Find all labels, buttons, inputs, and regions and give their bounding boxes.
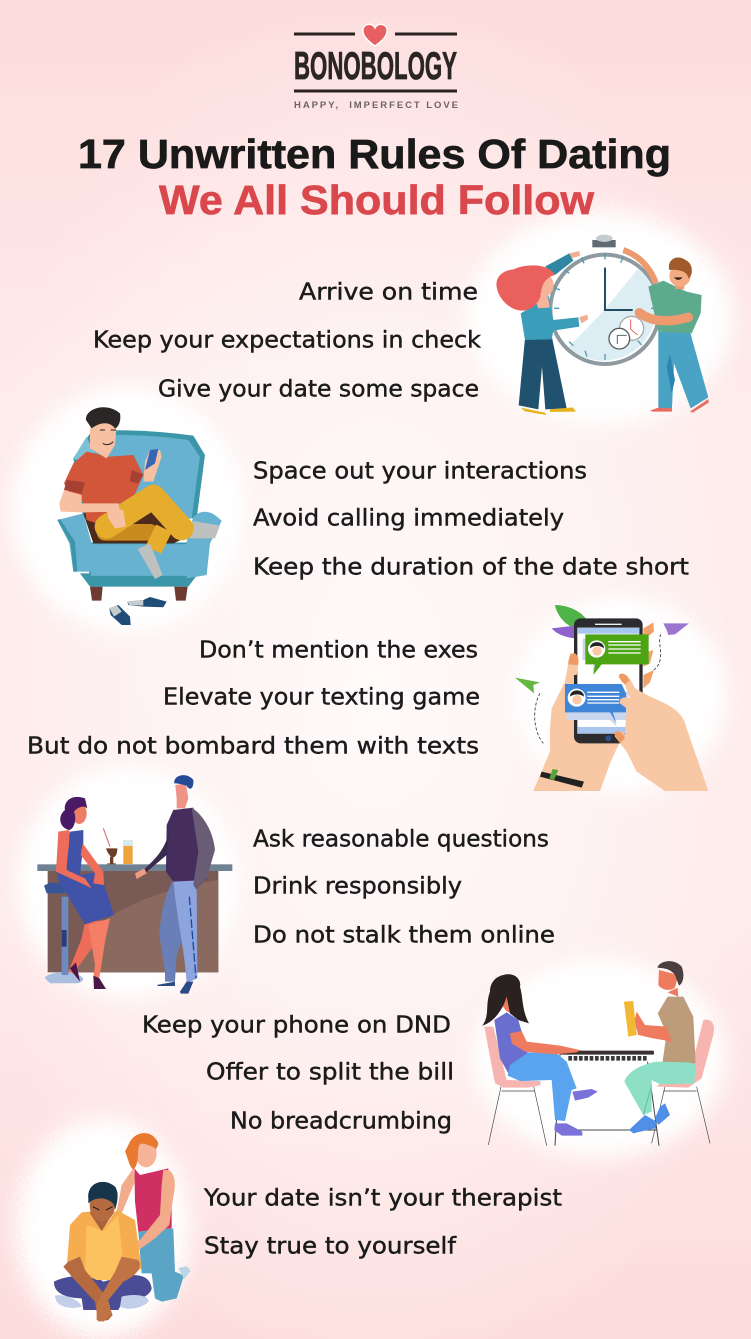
rules group 1: Arrive on time: [299, 279, 478, 305]
icon: heart: [363, 24, 387, 46]
rules group 5: [142, 1012, 454, 1134]
rules group 3: But do not bombard them with texts: [27, 733, 479, 759]
logo: BONOBOLOGY: [294, 45, 457, 88]
rules group 4: [253, 826, 555, 948]
illustration: couple at a bar counter: [37, 775, 232, 994]
rules group 1: Keep your expectations in check: [93, 327, 482, 353]
logo: HAPPY, IMPERFECT LOVE: [294, 100, 458, 111]
rules group 3: Don’t mention the exes: [199, 637, 478, 663]
illustration: hands holding phone with chat bubbles: [515, 605, 708, 791]
rules group 6: Your date isn’t your therapist: [203, 1185, 562, 1211]
logo: [294, 24, 458, 111]
rules group 6: Stay true to yourself: [204, 1233, 457, 1259]
illustration: couple holding a clock: [496, 235, 709, 415]
illustration: man on armchair with phone: [57, 407, 222, 625]
rules group 6: [203, 1185, 562, 1259]
rules group 2: Avoid calling immediately: [253, 505, 564, 531]
rules group 2: [253, 458, 689, 580]
rules group 5: Offer to split the bill: [206, 1059, 454, 1085]
rules group 4: Drink responsibly: [253, 873, 462, 899]
rules group 2: Space out your interactions: [253, 458, 587, 484]
rules group 5: Keep your phone on DND: [142, 1012, 451, 1038]
title: 17 Unwritten Rules Of Dating: [78, 131, 671, 177]
illustration: woman comforting seated man: [54, 1133, 191, 1322]
title: [78, 131, 671, 223]
rules group 3: Elevate your texting game: [163, 684, 480, 710]
rules group 4: Ask reasonable questions: [253, 826, 549, 852]
rules group 5: No breadcrumbing: [230, 1108, 452, 1134]
rules group 3: [27, 637, 480, 759]
rules group 1: [93, 279, 482, 402]
illustration: couple at a restaurant table: [482, 961, 714, 1146]
rules group 1: Give your date some space: [158, 376, 479, 402]
rules group 4: Do not stalk them online: [253, 922, 555, 948]
title: We All Should Follow: [159, 177, 594, 223]
rules group 2: Keep the duration of the date short: [253, 554, 689, 580]
